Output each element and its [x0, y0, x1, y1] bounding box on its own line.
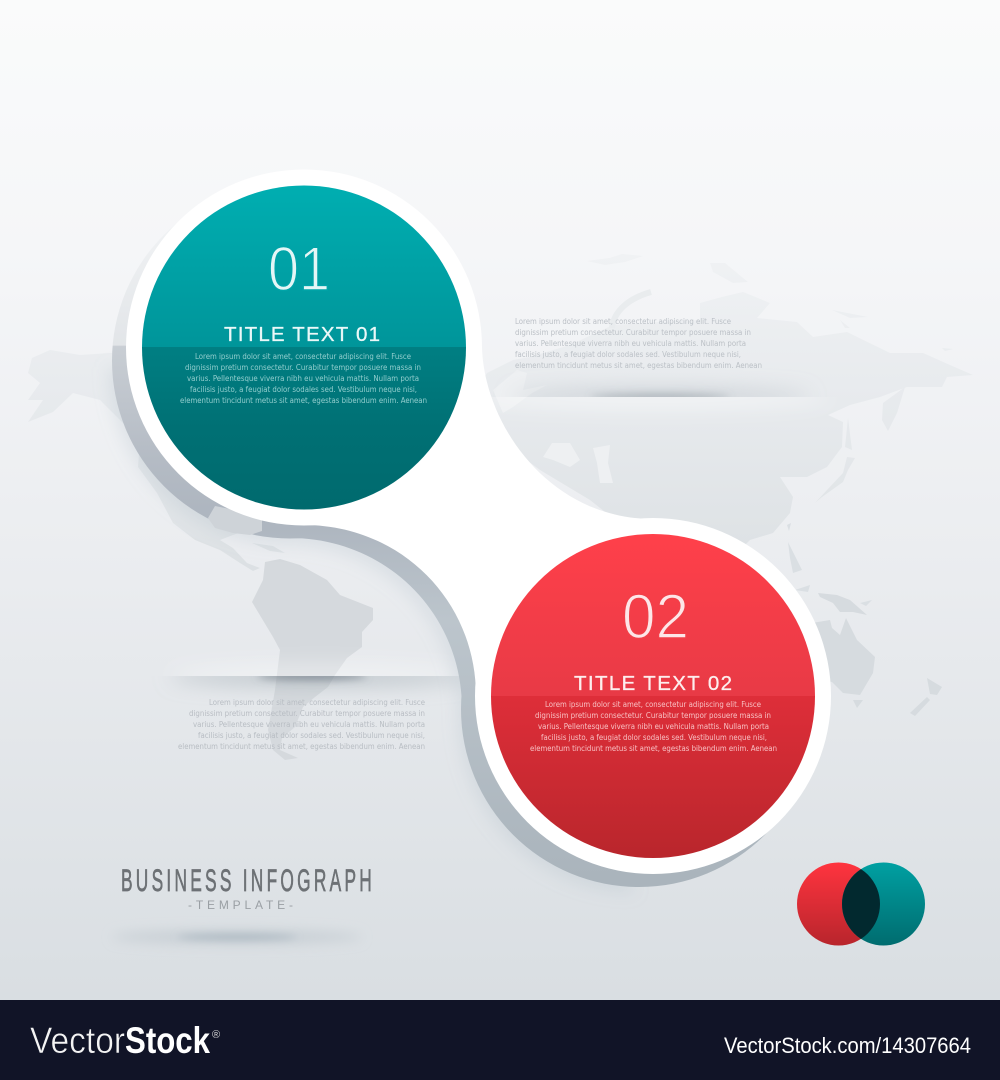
text block: right paragraph: Lorem ipsum dolor sit amet, consectetur adipiscing elit. Fusce [515, 316, 731, 326]
map: New Guinea [818, 593, 867, 615]
body text 02: elementum tincidunt metus sit amet, egestas bibendum enim. Aenean [530, 743, 777, 753]
white connected shape [126, 170, 831, 874]
text block: left paragraph: Lorem ipsum dolor sit amet, consectetur adipiscing elit. Fusce [209, 697, 425, 707]
body text 01 [180, 351, 427, 405]
icon: overlapping circles [797, 862, 925, 946]
footer logo: Stock [125, 1020, 210, 1061]
body text 02 [530, 699, 777, 753]
body text 02: facilisis justo, a feugiat dolor sodales sed. Vestibulum neque nisi, [541, 732, 767, 742]
circle: red disc [488, 532, 818, 860]
body text 02: Lorem ipsum dolor sit amet, consectetur adipiscing elit. Fusce [545, 699, 761, 709]
map: Australia [812, 618, 875, 708]
footer logo: ® [212, 1029, 220, 1041]
body text 01: varius. Pellentesque viverra nibh eu vehicula mattis. Nullam porta [187, 373, 419, 383]
map: arctic islands [587, 254, 953, 351]
footer url: VectorStock.com/14307664 [724, 1033, 971, 1058]
map: Southeast Asia islands [787, 523, 872, 606]
text block: left paragraph: varius. Pellentesque viverra nibh eu vehicula mattis. Nullam porta [193, 719, 425, 729]
map: South America [252, 559, 373, 760]
map: New Zealand [910, 678, 942, 716]
map: Gulf coast over shadow [208, 506, 262, 535]
number 02: 02 [622, 582, 689, 652]
number 01: 01 [268, 235, 330, 304]
body text 02: dignissim pretium consectetur. Curabitur tempor posuere massa in [535, 710, 771, 720]
text block: right paragraph: dignissim pretium consectetur. Curabitur tempor posuere massa in [515, 327, 751, 337]
map: Kamchatka [882, 387, 905, 431]
ground shadow [112, 930, 362, 944]
text block: right paragraph: elementum tincidunt metus sit amet, egestas bibendum enim. Aenean [515, 360, 762, 370]
soft shadow of connected shape [108, 367, 635, 893]
panel: step 01 [140, 185, 470, 511]
world map [28, 254, 973, 760]
panel rule: right text [527, 384, 790, 397]
panel: step 02 [488, 532, 818, 860]
text block: left paragraph: facilisis justo, a feugiat dolor sodales sed. Vestibulum neque nisi, [198, 730, 425, 740]
heading: business infograph: BUSINESS INFOGRAPH [121, 864, 372, 898]
heading: title text 01: TITLE TEXT 01 [224, 323, 380, 346]
footer logo: Vector [30, 1020, 125, 1061]
circle: teal disc [140, 185, 470, 511]
body text 01: elementum tincidunt metus sit amet, egestas bibendum enim. Aenean [180, 395, 427, 405]
text block: left paragraph [178, 697, 425, 751]
map: North America [28, 350, 262, 571]
body text 01: Lorem ipsum dolor sit amet, consectetur adipiscing elit. Fusce [195, 351, 411, 361]
body text 02: varius. Pellentesque viverra nibh eu vehicula mattis. Nullam porta [538, 721, 769, 731]
map: Eurasia [470, 292, 973, 570]
footer logo [30, 1020, 220, 1061]
body text 01: facilisis justo, a feugiat dolor sodales sed. Vestibulum neque nisi, [190, 384, 417, 394]
map: inland seas [493, 370, 613, 483]
map: Caribbean islands [252, 543, 285, 553]
map: Novaya Zemlya [612, 292, 651, 328]
text block: right paragraph: varius. Pellentesque viverra nibh eu vehicula mattis. Nullam porta [515, 338, 746, 348]
map: Japan and Sakhalin [815, 418, 855, 503]
text block: right paragraph: facilisis justo, a feugiat dolor sodales sed. Vestibulum neque nisi, [515, 349, 741, 359]
text block: right paragraph [515, 316, 762, 370]
heading: title text 02: TITLE TEXT 02 [574, 672, 732, 695]
footer bar [0, 1000, 1000, 1080]
panel rule: left text [170, 664, 470, 688]
text block: left paragraph: elementum tincidunt metus sit amet, egestas bibendum enim. Aenean [178, 741, 425, 751]
text block: left paragraph: dignissim pretium consectetur. Curabitur tempor posuere massa in [189, 708, 425, 718]
hard shadow of connected shape [112, 182, 817, 887]
body text 01: dignissim pretium consectetur. Curabitur tempor posuere massa in [185, 362, 421, 372]
subheading: template: -TEMPLATE- [188, 898, 293, 912]
